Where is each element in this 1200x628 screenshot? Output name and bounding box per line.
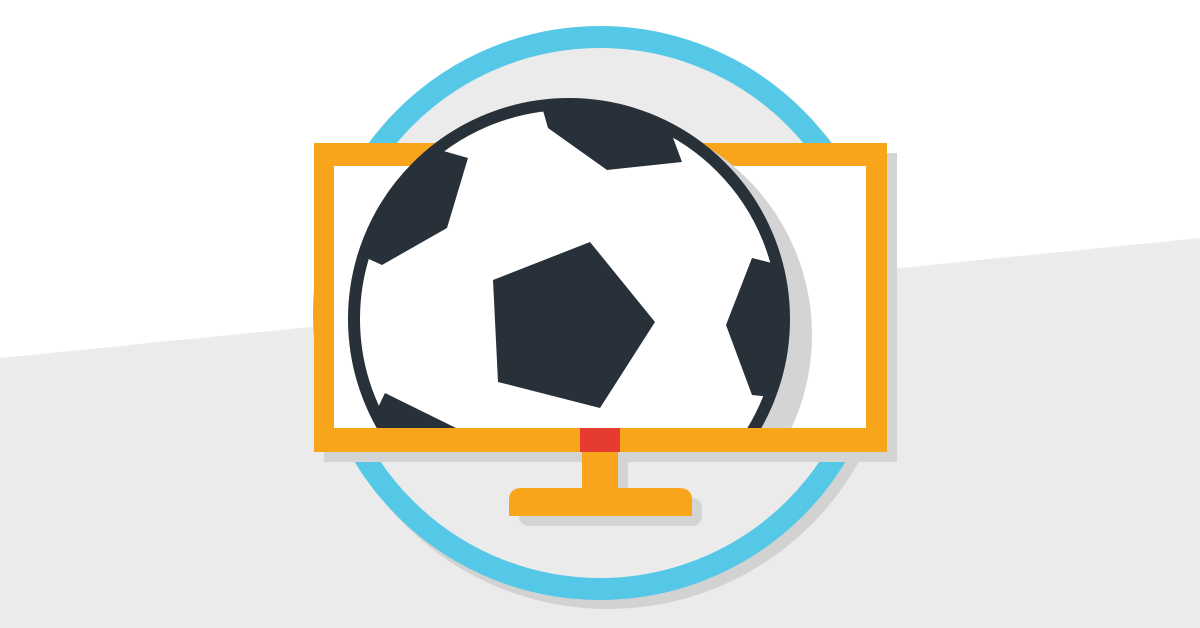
right patch [726,258,778,396]
circle interior [324,37,876,589]
TV bottom bar over ball [314,428,580,452]
ring shadow [332,46,884,598]
TV shadow [324,153,897,526]
stand base [509,488,692,516]
ball shadow [709,148,812,428]
soccer ball [348,98,812,428]
background: gray diagonal band [0,238,1200,628]
top patch [543,110,682,170]
blue ring [324,37,876,589]
TV screen [334,166,866,428]
left patch [360,150,468,265]
TV frame [314,143,887,516]
stand neck [582,452,618,490]
center pentagon [493,242,655,408]
power indicator [580,428,620,452]
bottom-left patch [378,393,456,428]
